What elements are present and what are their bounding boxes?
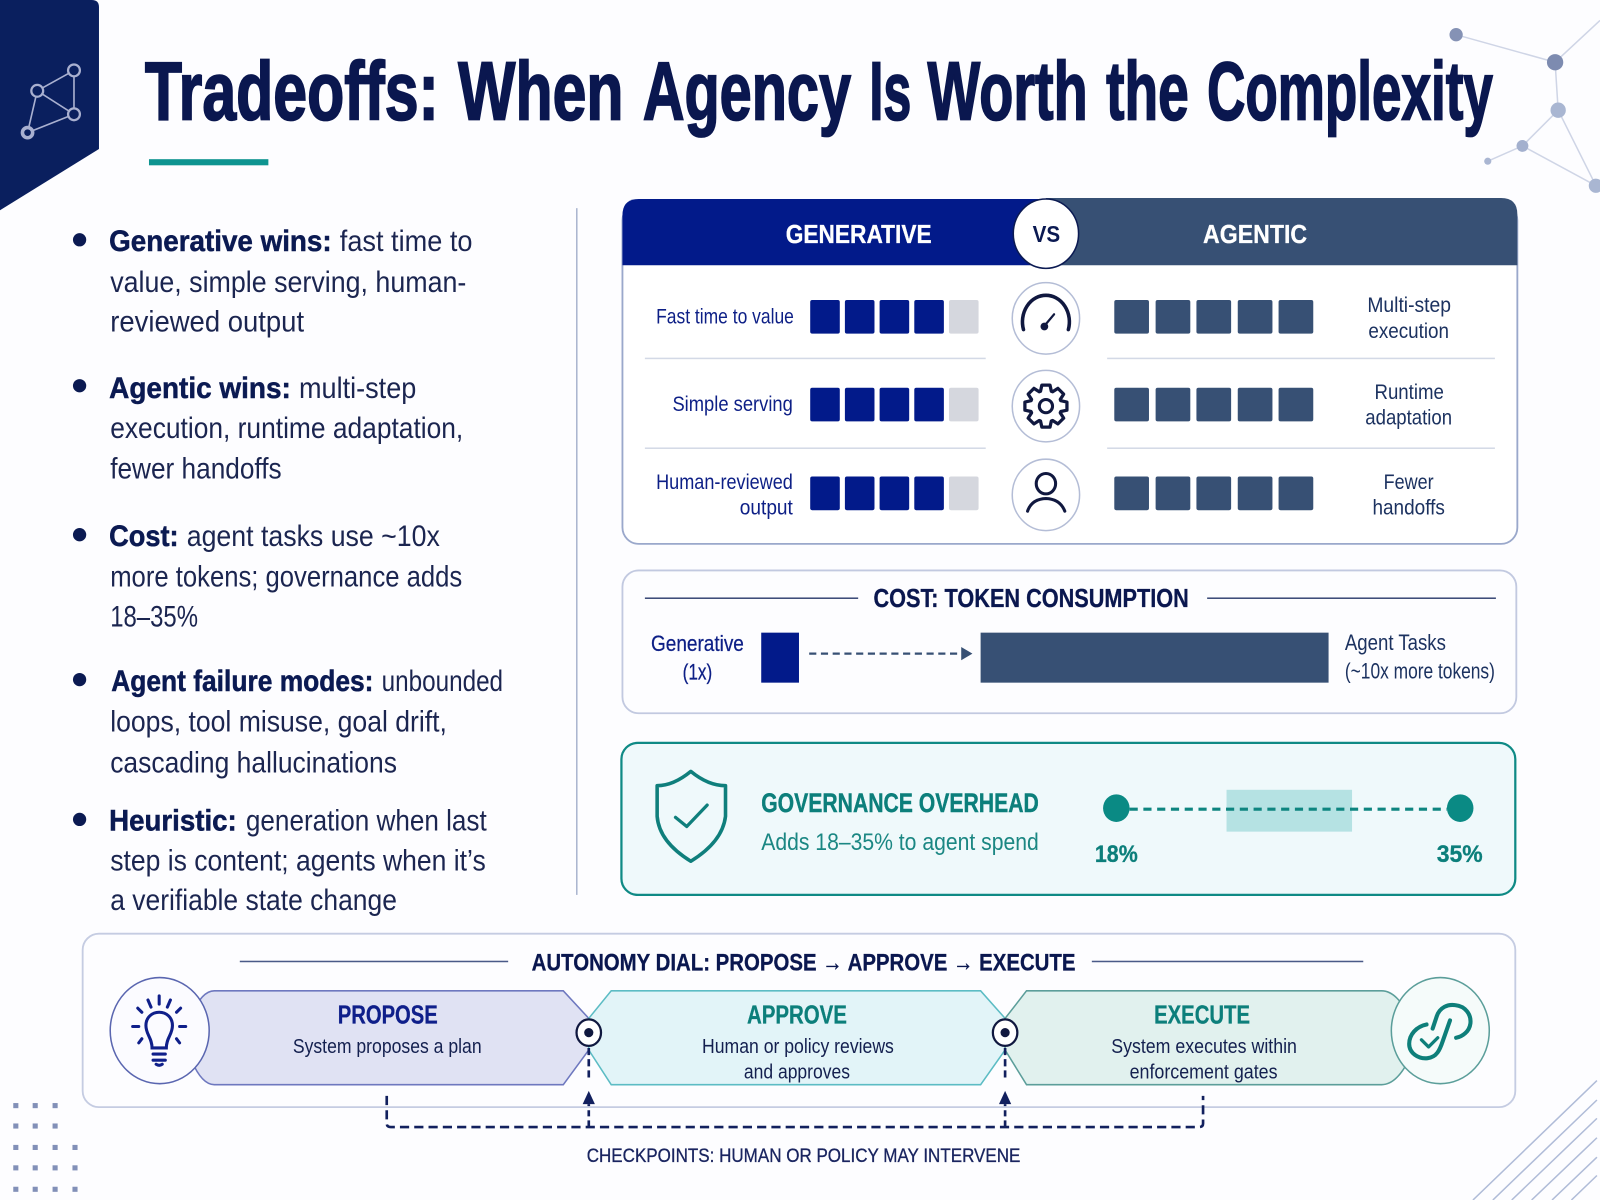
- governance text: [761, 788, 1039, 856]
- title: Tradeoffs:: [145, 44, 439, 137]
- governance text: Adds 18–35% to agent spend: [761, 829, 1039, 856]
- title: the: [1106, 44, 1189, 137]
- title: Worth: [928, 44, 1088, 137]
- title: Is: [869, 44, 911, 137]
- row: simple serving: [672, 380, 1452, 429]
- header: generative: [622, 199, 1051, 265]
- governance text: GOVERNANCE OVERHEAD: [761, 788, 1039, 818]
- stage: propose: [192, 991, 589, 1085]
- row: simple serving: Simple serving: [672, 392, 793, 416]
- bullet: generative wins: reviewed output: [110, 306, 304, 339]
- row: fast time to value: execution: [1368, 319, 1449, 343]
- bullet: agentic wins: execution, runtime adaptation,: [110, 412, 463, 445]
- header: generative: GENERATIVE: [786, 221, 932, 249]
- title: Agency: [643, 44, 851, 137]
- row: human-reviewed output: output: [740, 495, 793, 519]
- stage: propose: System proposes a plan: [293, 1036, 482, 1058]
- bullet: heuristic: Heuristic:: [109, 805, 237, 838]
- bullet: agentic wins: fewer handoffs: [110, 453, 282, 486]
- bullet: generative wins: [73, 225, 472, 339]
- bar: agent tasks 10x: [981, 633, 1329, 683]
- row: human-reviewed output: handoffs: [1372, 495, 1445, 519]
- checkpoint marker: approve to execute: [993, 1019, 1017, 1046]
- panel: generative vs agentic comparison: [622, 198, 1517, 544]
- stage: approve: and approves: [744, 1062, 850, 1084]
- stage: approve: [589, 991, 1005, 1085]
- bullet: generative wins: Generative wins:: [109, 225, 332, 258]
- range chart 18 to 35 percent: 35%: [1437, 841, 1483, 868]
- bullet: agentic wins: Agentic wins:: [109, 372, 291, 405]
- bullet: cost: more tokens; governance adds: [110, 561, 462, 594]
- generative label: Generative: [651, 631, 744, 656]
- title: When: [458, 44, 623, 137]
- bullet: cost: Cost:: [109, 520, 179, 553]
- bullet: agent failure modes: Agent failure modes:: [111, 665, 373, 698]
- row: human-reviewed output: Fewer: [1384, 470, 1434, 494]
- stage: approve: APPROVE: [747, 1001, 847, 1029]
- checkpoint caption: CHECKPOINTS: HUMAN OR POLICY MAY INTERVENE: [587, 1145, 1020, 1167]
- title underline: [149, 159, 268, 165]
- arrow: dashed: [809, 647, 972, 660]
- header: agentic: [1046, 198, 1517, 265]
- icon: chain with check: [1391, 978, 1489, 1084]
- VS badge: [1013, 199, 1079, 268]
- panel: token cost: [622, 570, 1516, 713]
- header: agentic: AGENTIC: [1203, 221, 1307, 249]
- icon: person: [1012, 459, 1080, 531]
- icon: light bulb: [110, 978, 209, 1084]
- bullet: heuristic: [73, 805, 487, 917]
- checkpoint dashed connectors: [387, 1047, 1203, 1127]
- panel: governance overhead: [621, 743, 1515, 895]
- decorative network top right: [1449, 20, 1600, 193]
- corner banner with network icon: [0, 0, 99, 210]
- bullet: agentic wins: multi-step: [299, 372, 416, 405]
- bullet: heuristic: step is content; agents when it’s: [110, 844, 486, 877]
- bullet: cost: agent tasks use ~10x: [187, 520, 440, 553]
- row: simple serving: Runtime: [1374, 380, 1444, 404]
- icon: speedometer: [1012, 283, 1080, 354]
- icon: gear: [1012, 370, 1080, 442]
- stage: execute: enforcement gates: [1130, 1062, 1278, 1084]
- panel: autonomy dial: [83, 934, 1515, 1107]
- VS badge: VS: [1033, 221, 1060, 247]
- bullet: heuristic: generation when last: [246, 805, 487, 838]
- bullet: agent failure modes: loops, tool misuse, goal drift,: [110, 706, 447, 739]
- stage: execute: EXECUTE: [1154, 1001, 1250, 1029]
- range chart 18 to 35 percent: 18%: [1095, 841, 1138, 868]
- icon: shield: [657, 771, 726, 861]
- heading: cost: COST: TOKEN CONSUMPTION: [873, 585, 1189, 613]
- row: simple serving: adaptation: [1365, 405, 1452, 429]
- stage: execute: [1005, 991, 1408, 1085]
- stage: execute: System executes within: [1111, 1036, 1297, 1058]
- stage: propose: PROPOSE: [338, 1001, 438, 1029]
- bullet: cost: 18–35%: [110, 601, 198, 634]
- bullet: agent failure modes: [73, 665, 503, 779]
- agent tasks label: Agent Tasks: [1345, 630, 1446, 655]
- icon: network: [22, 64, 80, 138]
- row: fast time to value: Multi-step: [1367, 293, 1451, 317]
- generative label: [651, 631, 744, 685]
- bullet: agent failure modes: cascading hallucinations: [110, 746, 397, 779]
- stage: approve: Human or policy reviews: [702, 1036, 894, 1058]
- bullet: heuristic: a verifiable state change: [110, 884, 397, 917]
- bullet list: [73, 225, 503, 917]
- generative label: (1x): [683, 660, 712, 685]
- bullet: generative wins: fast time to: [340, 225, 472, 258]
- range chart 18 to 35 percent: [1095, 790, 1483, 868]
- title: [145, 44, 1493, 137]
- checkpoint marker: propose to approve: [577, 1019, 601, 1046]
- row: human-reviewed output: Human-reviewed: [656, 470, 793, 494]
- bar: generative 1x: [761, 633, 799, 683]
- row: fast time to value: [656, 293, 1451, 343]
- agent tasks label: (~10x more tokens): [1345, 659, 1495, 684]
- row: fast time to value: Fast time to value: [656, 304, 794, 328]
- agent tasks label: [1345, 630, 1495, 684]
- bullet: agent failure modes: unbounded: [382, 665, 503, 698]
- bullet: generative wins: value, simple serving, human-: [110, 266, 466, 299]
- row: human-reviewed output: [656, 470, 1445, 519]
- bullet: agentic wins: [73, 372, 463, 486]
- heading: autonomy dial: AUTONOMY DIAL: PROPOSE → APPROVE → EXECUTE: [532, 949, 1076, 976]
- bullet: cost: [73, 520, 462, 634]
